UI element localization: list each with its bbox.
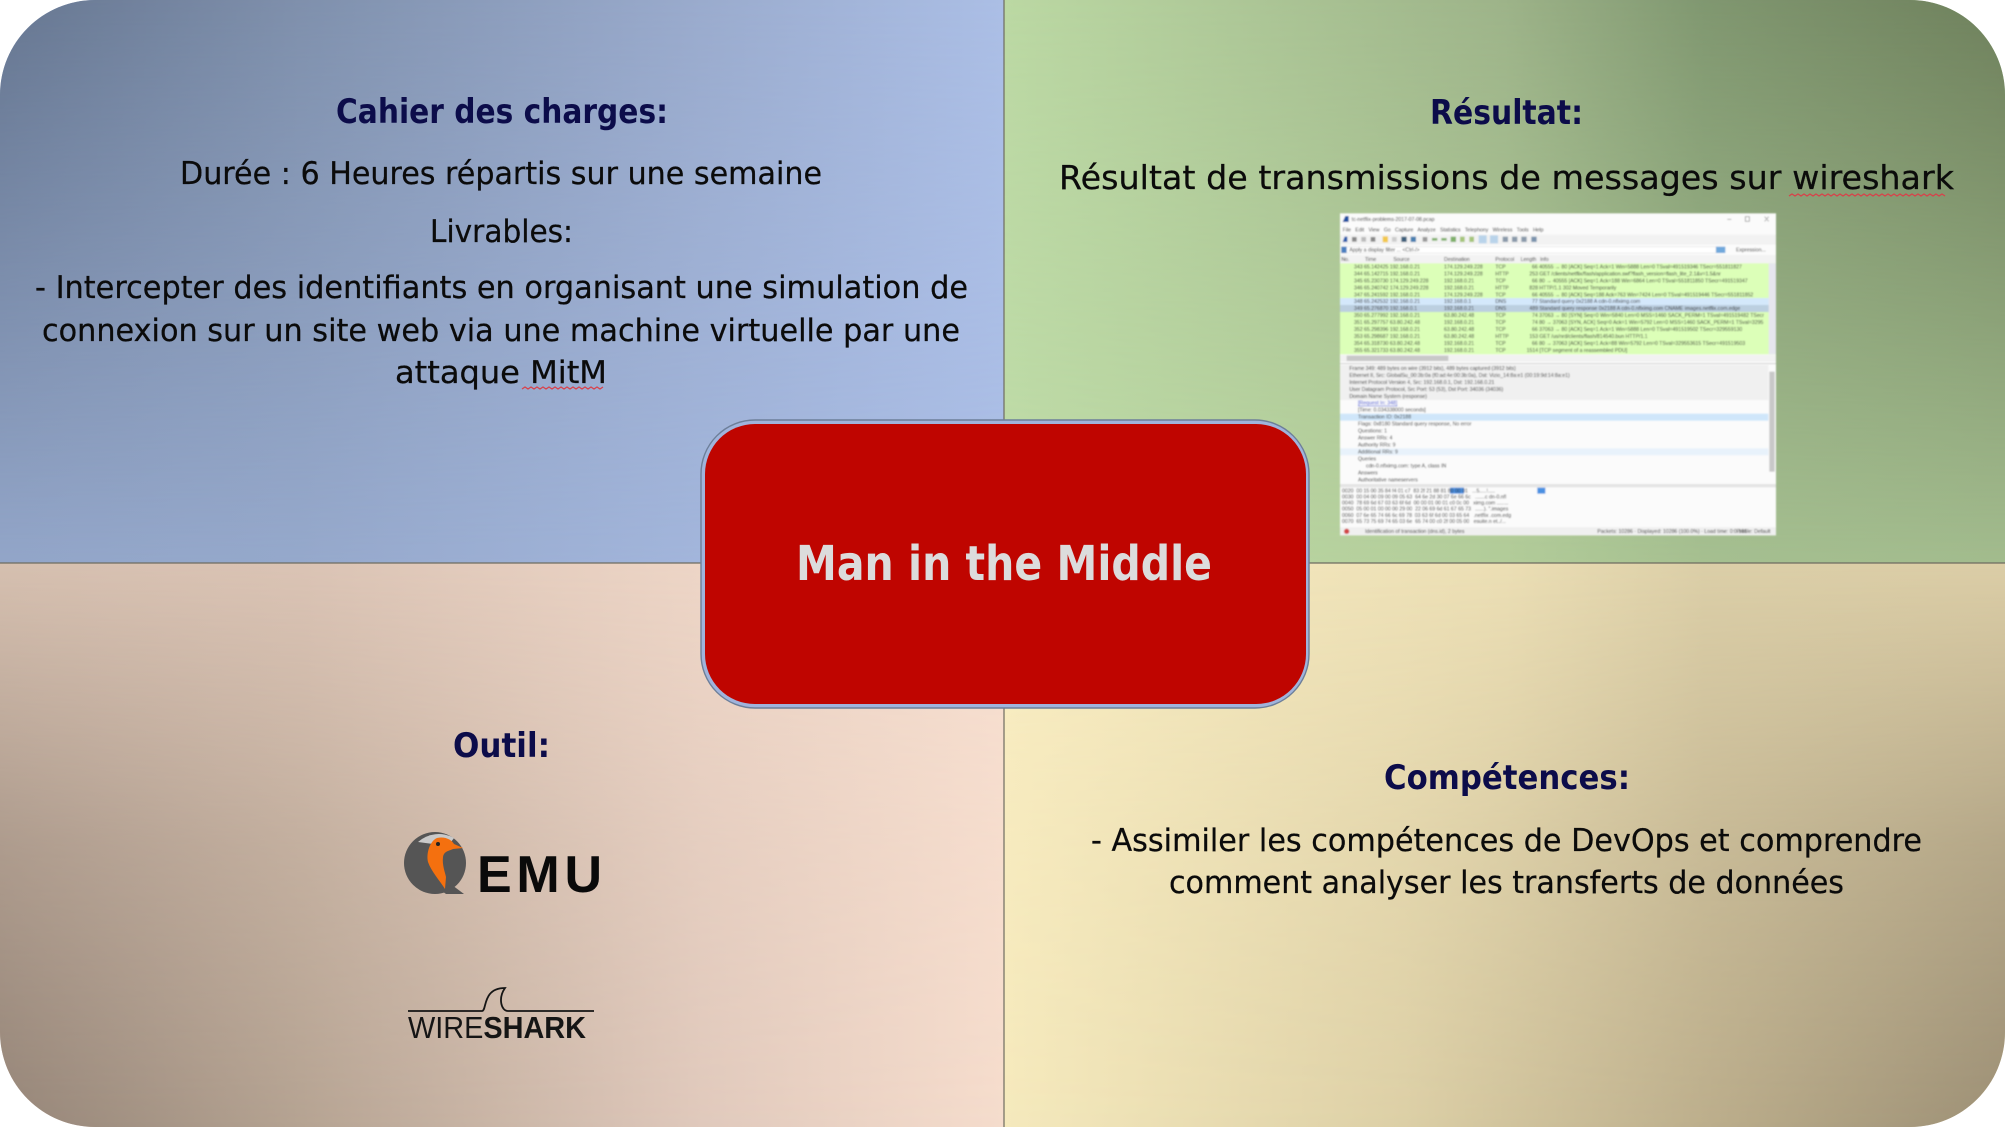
screenshot: wireshark capture: 344 65.142715 192.168.0.21 [1354,271,1420,277]
text: livrables description: connexion sur un site web via une machine virtuelle par une [42,313,960,349]
screenshot: wireshark capture: 192.168.0.21 [1444,320,1474,326]
screenshot: wireshark capture: 66 40555 → 80 [ACK] Seq=188 Ack=763 Win=7424 Len=0 TSval=491519446 TSecr=551811852 [1532,292,1753,298]
screenshot: wireshark capture: Expression... [1736,247,1766,253]
screenshot: wireshark capture: 66 37063 → 80 [ACK] Seq=1 Ack=1 Win=5888 Len=0 TSval=491519502 TSecr=329559130 [1532,327,1742,333]
title: Man in the Middle: Man in the Middle [796,536,1212,592]
text: compétences description: comment analyser les transferts de données [1169,865,1844,901]
screenshot: wireshark capture: 0050 05 00 01 00 00 00 29 00 22 06 69 6d 61 67 65 73 ......). ".images [1342,507,1509,513]
screenshot: wireshark capture: TCP [1495,292,1506,298]
screenshot: wireshark capture: 0060 07 6e 65 74 66 6c 69 78 03 63 6f 6d 00 03 65 64 .netflix .com.edg [1342,513,1511,519]
screenshot: wireshark capture: 828 HTTP/1.1 302 Moved Temporarily [1529,285,1617,291]
screenshot: wireshark capture: No. [1341,257,1349,263]
screenshot: wireshark capture: 0030 00 04 00 09 00 09 05 63 64 6e 2d 30 07 6e 66 6c .......c dn-0.nfl [1342,495,1506,501]
screenshot: wireshark capture: 0020 00 15 00 35 84 f4 01 c7 83 2f 21 88 81 80 00 01 ...5.....!..... [1342,488,1495,494]
screenshot: wireshark capture: TCP [1495,341,1506,347]
text: résultat description: Résultat de transmissions de messages sur wireshark [1059,158,1955,197]
screenshot: wireshark capture: 0040 78 69 6d 67 03 63 6f 6d 00 00 01 00 01 c0 0c 00 ximg.com ........ [1342,501,1508,507]
screenshot: wireshark capture: HTTP [1495,285,1509,291]
screenshot: wireshark capture: 349 65.276870 192.168.0.1 [1354,306,1417,312]
screenshot: wireshark capture: 66 80 → 40555 [ACK] Seq=1 Ack=188 Win=6864 Len=0 TSval=551811850 TSecr=491519347 [1532,278,1748,284]
screenshot: wireshark capture: 352 65.298396 192.168.0.21 [1354,327,1420,333]
logo: Wireshark [408,988,594,1045]
screenshot: wireshark capture: 253 GET /clients/netflix/flash/application.swf?flash_version=flash_lite_2.1&v=1.5&nr [1529,271,1721,277]
screenshot: wireshark capture: 346 65.240742 174.129.249.228 [1354,285,1429,291]
screenshot: wireshark capture: Flags: 0x8180 Standard query response, No error [1358,422,1472,428]
screenshot: wireshark capture: TCP [1495,327,1506,333]
screenshot: wireshark capture: 347 65.241592 192.168.0.21 [1354,292,1420,298]
screenshot: wireshark capture: 63.80.242.48 [1444,334,1474,340]
screenshot: wireshark capture: Internet Protocol Version 4, Src: 192.168.0.1, Dst: 192.168.0.21 [1349,380,1495,386]
central box: Man in the Middle [701,420,1309,708]
logo: QEMU: EMU [477,846,602,904]
screenshot: wireshark capture: Source [1393,257,1410,263]
screenshot: wireshark capture: cdn-0.nflximg.com: type A, class IN [1366,463,1447,469]
screenshot: wireshark capture: Answer RRs: 4 [1358,436,1393,442]
screenshot: wireshark capture: [Time: 0.034338000 seconds] [1358,408,1426,414]
panel: outil [404,726,602,1045]
screenshot: wireshark capture: Identification of transaction (dns.id), 2 bytes [1365,529,1465,535]
screenshot: wireshark capture: 192.168.0.21 [1444,278,1474,284]
screenshot: wireshark capture: TCP [1495,264,1506,270]
screenshot: wireshark capture: Destination [1444,257,1470,263]
text: livrables description [35,270,968,391]
text: livrables: Livrables: [430,214,573,250]
screenshot: wireshark capture: 192.168.0.21 [1444,341,1474,347]
spellcheck underline: wireshark [1789,194,1945,196]
heading: outil: Outil: [453,726,550,766]
screenshot: wireshark capture: 1514 [TCP segment of a reassembled PDU] [1527,348,1628,354]
screenshot: wireshark capture: TCP [1495,278,1506,284]
screenshot: wireshark capture: 74 37063 → 80 [SYN] Seq=0 Win=5840 Len=0 MSS=1460 SACK_PERM=1 TSval=491519482 TSecr [1532,313,1764,319]
screenshot: wireshark capture: 63.80.242.48 [1444,313,1474,319]
screenshot: wireshark capture: Authoritative nameservers [1358,477,1418,483]
text: compétences description [1091,823,1922,901]
screenshot: wireshark capture: File Edit View Go Capture Analyze Statistics Telephony Wireless Tools Help [1343,227,1544,233]
panel: compétences text [1091,758,1922,901]
screenshot: wireshark capture: Queries [1358,456,1376,462]
screenshot: wireshark capture: HTTP [1495,334,1509,340]
screenshot: wireshark capture: 192.168.0.21 [1444,306,1474,312]
panel: compétences background [1004,563,2005,1127]
screenshot: wireshark capture: Authority RRs: 9 [1358,442,1396,448]
screenshot: wireshark capture: DNS [1495,299,1507,305]
screenshot: wireshark capture: Answers [1358,470,1378,476]
screenshot: wireshark capture: 174.129.249.228 [1444,292,1483,298]
screenshot: wireshark capture: Time [1365,257,1376,263]
screenshot: wireshark capture: Info [1540,257,1549,263]
screenshot: wireshark capture: 343 65.142425 192.168.0.21 [1354,264,1420,270]
panel: cahier des charges background [0,0,1004,563]
text: durée: Durée : 6 Heures répartis sur une semaine [180,156,822,192]
screenshot: wireshark capture: 351 65.297757 63.80.242.48 [1354,320,1420,326]
screenshot: wireshark capture: Profile: Default [1737,529,1771,535]
screenshot: wireshark capture: 345 65.230730 174.129.249.228 [1354,278,1429,284]
panel: outil background [0,563,1004,1127]
screenshot: wireshark capture: Domain Name System (response) [1349,394,1427,400]
screenshot: wireshark capture: 192.168.0.1 [1444,299,1471,305]
screenshot: wireshark capture: 192.168.0.21 [1444,348,1474,354]
screenshot: wireshark capture: 350 65.277992 192.168.0.21 [1354,313,1420,319]
screenshot: wireshark capture: 77 Standard query 0x2188 A cdn-0.nflximg.com [1532,299,1640,305]
screenshot: wireshark capture [1340,213,1776,535]
heading: résultat: Résultat: [1430,93,1583,133]
screenshot: wireshark capture: TCP [1495,348,1506,354]
screenshot: wireshark capture: Length [1521,257,1537,263]
screenshot: wireshark capture: 63.80.242.48 [1444,327,1474,333]
text: livrables description: - Intercepter des identifiants en organisant une simulation de [35,270,968,306]
logo: QEMU [404,832,602,904]
screenshot: wireshark capture: TCP [1495,313,1506,319]
screenshot: wireshark capture: 74 80 → 37063 [SYN, ACK] Seq=0 Ack=1 Win=5792 Len=0 MSS=1460 SACK_PERM=1 TSval=3295 [1532,320,1763,326]
screenshot: wireshark capture: 348 65.242532 192.168.0.21 [1354,299,1420,305]
spellcheck underline: MitM [522,387,603,389]
text: livrables description: attaque MitM [395,355,607,391]
screenshot: wireshark capture: 0070 65 73 75 69 74 65 03 6e 65 74 00 c0 2f 00 05 00 esuite.n et../... [1342,519,1506,525]
screenshot: wireshark capture: DNS [1495,306,1507,312]
screenshot: wireshark capture: Apply a display filter ... <Ctrl-/> [1349,248,1420,254]
text: compétences description: - Assimiler les compétences de DevOps et comprendre [1091,823,1922,859]
screenshot: wireshark capture: [Request In: 348] [1358,401,1398,407]
screenshot: wireshark capture: Protocol [1495,257,1514,263]
panel: résultat text [1059,93,1955,197]
screenshot: wireshark capture: TCP [1495,320,1506,326]
screenshot: wireshark capture: Packets: 10286 · Displayed: 10286 (100.0%) · Load time: 0:0.181 [1597,529,1747,535]
panel: résultat background [1004,0,2005,563]
screenshot: wireshark capture: 174.129.249.228 [1444,264,1483,270]
screenshot: wireshark capture: 192.168.0.21 [1444,285,1474,291]
screenshot: wireshark capture: Transaction ID: 0x2188 [1358,415,1411,421]
screenshot: wireshark capture: HTTP [1495,271,1509,277]
panel: cahier des charges text [35,92,968,391]
logo: Wireshark: WIRESHARK [408,1010,587,1045]
screenshot: wireshark capture: 66 80 → 37063 [ACK] Seq=1 Ack=88 Win=5792 Len=0 TSval=329553615 TSecr=491519503 [1532,341,1745,347]
screenshot: wireshark capture: Frame 349: 489 bytes on wire (3912 bits), 489 bytes captured (3912 bits) [1349,366,1516,372]
screenshot: wireshark capture: User Datagram Protocol, Src Port: 53 (53), Dst Port: 34036 (34036) [1349,387,1504,393]
heading: cahier des charges: Cahier des charges: [336,92,668,132]
screenshot: wireshark capture: Ethernet II, Src: GlobalSu_00:3b:0a (f0:ad:4e:00:3b:0a), Dst: Vizio_14:8a:e1 (00:19:9d:14:8a:e1) [1349,373,1570,379]
screenshot: wireshark capture: 174.129.249.228 [1444,271,1483,277]
heading: compétences: Compétences: [1384,758,1630,798]
screenshot: wireshark capture: 355 65.321733 63.80.242.48 [1354,348,1420,354]
screenshot: wireshark capture: 489 Standard query response 0x2188 A cdn-0.nflximg.com CNAME images.netflix.com.edge [1529,306,1740,312]
screenshot: wireshark capture: 66 40555 → 80 [ACK] Seq=1 Ack=1 Win=5888 Len=0 TSval=491519346 TSecr=551811827 [1532,264,1742,270]
screenshot: wireshark capture: tc-netflix-problems-2017-07-08.pcap [1352,217,1435,223]
screenshot: wireshark capture: 354 65.318730 63.80.242.48 [1354,341,1420,347]
screenshot: wireshark capture: Questions: 1 [1358,429,1387,435]
screenshot: wireshark capture: Additional RRs: 9 [1358,449,1398,455]
screenshot: wireshark capture: 353 65.298687 192.168.0.21 [1354,334,1420,340]
screenshot: wireshark capture: 153 GET /us/nrd/clients/flash/814540.bun HTTP/1.1 [1529,334,1648,340]
